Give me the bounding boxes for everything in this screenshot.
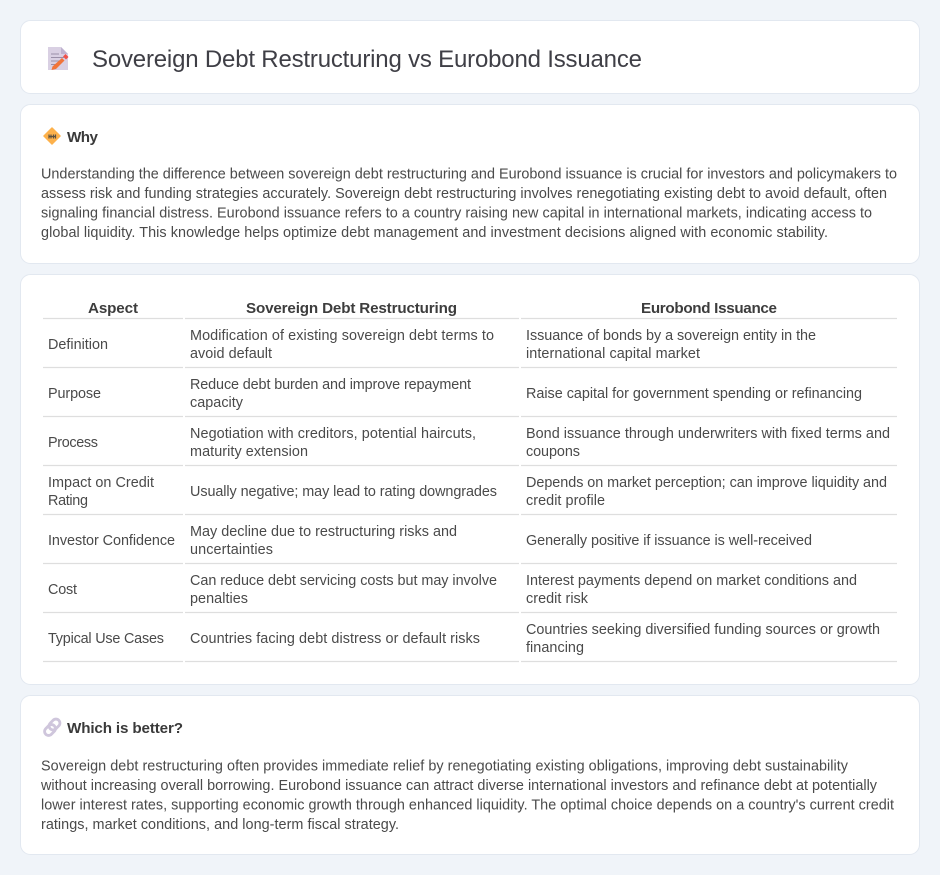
- row: investor confidence: [43, 524, 897, 564]
- why paragraph: [41, 166, 897, 241]
- title: Sovereign Debt Restructuring vs Eurobond Issuance: [92, 46, 642, 73]
- row: typical use cases: Countries seeking diversified funding sources or growth: [526, 622, 880, 638]
- table header row: [43, 300, 897, 318]
- row: impact on credit rating: Rating: [48, 493, 88, 509]
- table header row: Aspect: [88, 300, 138, 317]
- row: impact on credit rating: [43, 475, 897, 514]
- row: definition: Definition: [48, 337, 108, 353]
- heading: why: Why: [67, 129, 99, 146]
- row: purpose: Purpose: [48, 386, 101, 402]
- row: investor confidence: Generally positive if issuance is well-received: [526, 533, 812, 549]
- row: process: Negotiation with creditors, potential haircuts,: [190, 426, 476, 442]
- row: purpose: Reduce debt burden and improve repayment: [190, 377, 471, 393]
- why paragraph: Understanding the difference between sovereign debt restructuring and Eurobond issuance is crucial for investors and policymakers to: [41, 166, 897, 182]
- which is better paragraph: [40, 758, 894, 833]
- which is better paragraph: Sovereign debt restructuring often provides immediate relief by renegotiating existing obligations, improving debt sustainability: [41, 758, 849, 774]
- row: process: coupons: [526, 444, 580, 460]
- icon: document with pencil: [48, 47, 68, 70]
- why paragraph: signaling financial distress. Eurobond issuance refers to a country raising new capital in international markets, indicating access to: [41, 206, 872, 222]
- row: investor confidence: May decline due to restructuring risks and: [190, 524, 457, 540]
- which is better paragraph: without increasing overall borrowing. Eurobond issuance can attract diverse international investors and refinance debt at potentially: [40, 778, 878, 794]
- row: cost: credit risk: [526, 591, 589, 607]
- row: cost: Cost: [48, 582, 77, 598]
- row: process: Process: [48, 435, 98, 451]
- row: typical use cases: Typical Use Cases: [48, 631, 164, 647]
- panel: which is better: [20, 696, 920, 854]
- row: definition: [43, 328, 897, 368]
- row: typical use cases: Countries facing debt distress or default risks: [190, 631, 480, 647]
- row: typical use cases: financing: [526, 640, 584, 656]
- panel: comparison table: [20, 274, 920, 684]
- row: impact on credit rating: credit profile: [526, 493, 605, 509]
- heading: which is better: Which is better?: [67, 720, 183, 737]
- row: process: Bond issuance through underwriters with fixed terms and: [526, 426, 890, 442]
- row: typical use cases: [43, 622, 897, 662]
- row: definition: international capital market: [526, 346, 700, 362]
- row: definition: Modification of existing sovereign debt terms to: [190, 328, 494, 344]
- row: process: maturity extension: [190, 444, 308, 460]
- row: impact on credit rating: Impact on Credit: [48, 475, 154, 491]
- row: investor confidence: uncertainties: [190, 542, 273, 558]
- row: cost: Can reduce debt servicing costs but may involve: [190, 573, 497, 589]
- table header row: Sovereign Debt Restructuring: [246, 300, 457, 317]
- row: purpose: [43, 377, 897, 416]
- row: impact on credit rating: Depends on market perception; can improve liquidity and: [526, 475, 887, 491]
- table header row: Eurobond Issuance: [641, 300, 777, 317]
- icon: chain link: [43, 717, 62, 737]
- row: impact on credit rating: Usually negative; may lead to rating downgrades: [190, 484, 497, 500]
- row: cost: [43, 573, 897, 612]
- row: definition: Issuance of bonds by a sovereign entity in the: [526, 328, 816, 344]
- which is better paragraph: ratings, market conditions, and long-term fiscal strategy.: [41, 817, 399, 833]
- row: process: [43, 426, 897, 466]
- header panel: [20, 20, 920, 94]
- row: cost: Interest payments depend on market conditions and: [526, 573, 857, 589]
- why paragraph: assess risk and funding strategies accurately. Sovereign debt restructuring involves renegotiating existing debt to avoid default, often: [41, 186, 887, 202]
- which is better paragraph: lower interest rates, supporting economic growth through enhanced liquidity. The optimal choice depends on a country's current credit: [41, 798, 894, 814]
- row: purpose: capacity: [190, 395, 244, 411]
- row: investor confidence: Investor Confidence: [48, 533, 175, 549]
- row: definition: avoid default: [190, 346, 272, 362]
- icon: orange diamond sign: [44, 128, 60, 144]
- row: cost: penalties: [190, 591, 248, 607]
- why paragraph: global liquidity. This knowledge helps optimize debt management and investment decisions aligned with economic stability.: [41, 225, 828, 241]
- row: purpose: Raise capital for government spending or refinancing: [526, 386, 862, 402]
- panel: why: [20, 104, 920, 264]
